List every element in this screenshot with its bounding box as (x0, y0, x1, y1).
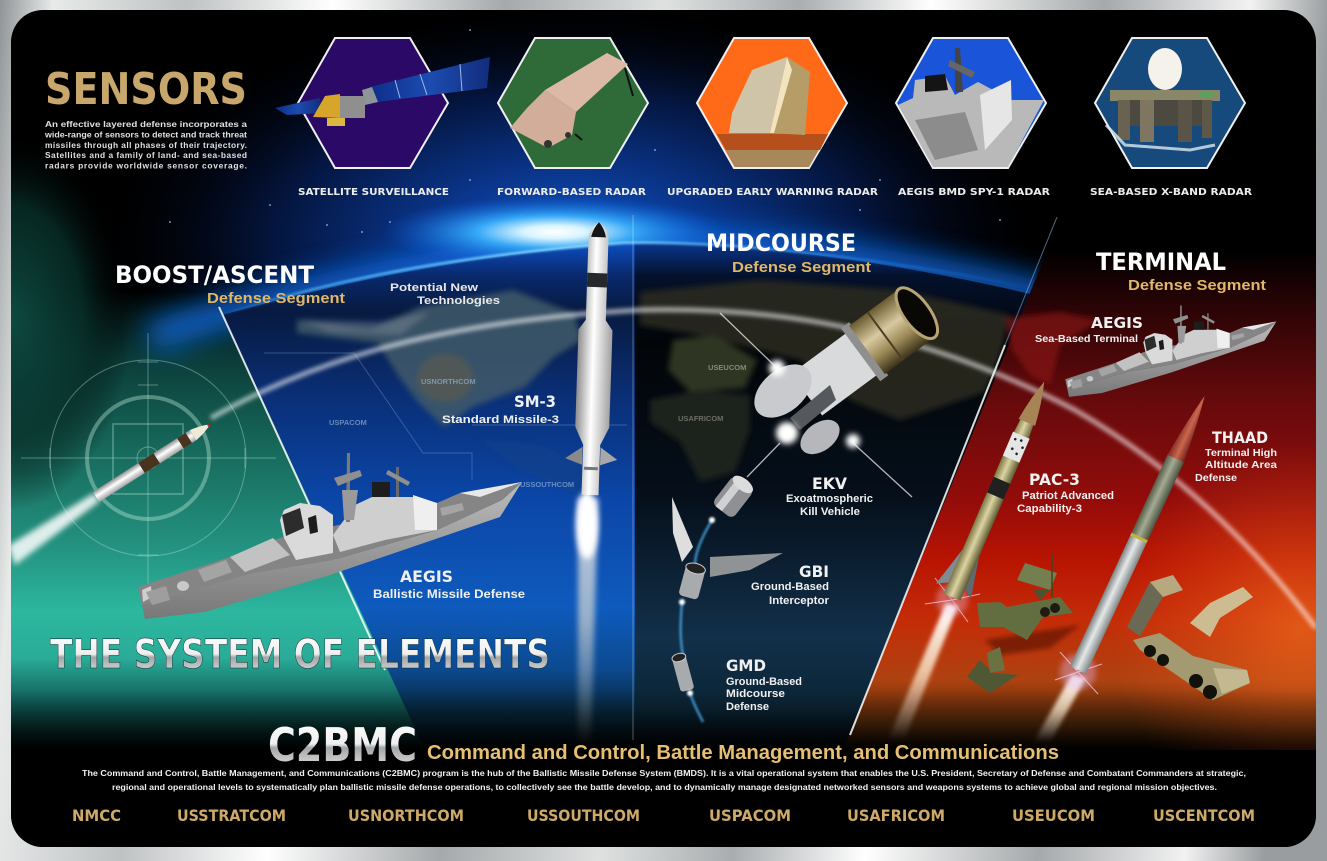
map command labels: USSOUTHCOM (520, 480, 574, 489)
heading: sensors: SENSORS (45, 64, 247, 115)
SM-3 plume (576, 491, 598, 745)
label: AEGIS ballistic missile defense: AEGIS (400, 567, 453, 586)
C2BMC description (82, 768, 1246, 792)
sensors description (44, 119, 247, 170)
icon: satellite (275, 57, 490, 126)
missile exhaust trail (8, 493, 100, 565)
label: GBI (751, 562, 830, 607)
combatant commands list: USNORTHCOM (348, 806, 464, 825)
sensors description: An effective layered defense incorporates a (45, 119, 247, 129)
label: THAAD: Defense (1195, 472, 1237, 484)
THAAD launcher truck (1127, 575, 1250, 700)
PAC-3 plume (888, 578, 980, 740)
PAC-3 radar (967, 647, 1018, 693)
heading: terminal (1096, 248, 1266, 294)
icon: sea-based radar platform (1106, 48, 1220, 150)
map command labels: USEUCOM (708, 363, 746, 372)
sensor labels: FORWARD-BASED RADAR (497, 187, 646, 198)
heading: C2BMC (268, 718, 1059, 772)
EKV rays (720, 313, 912, 497)
earth disc panels (224, 242, 1030, 740)
label: EKV: Kill Vehicle (800, 506, 860, 518)
heading: terminal: Defense Segment (1128, 277, 1266, 294)
hexagon: upgraded early warning radar (697, 38, 847, 168)
label: AEGIS sea-based terminal: AEGIS (1091, 314, 1143, 332)
C2BMC description: The Command and Control, Battle Management, and Communications (C2BMC) program is the hub of the Ballistic Missile Defense System (BMDS). It is a vital operational system that enables the U.S. President, Secretary of Defense and Combatant Commanders at strategic, (82, 768, 1246, 778)
SM-3 missile (565, 222, 617, 496)
sensor labels: AEGIS BMD SPY-1 RADAR (898, 187, 1050, 198)
heading: boost ascent: BOOST/ASCENT (115, 261, 315, 289)
terminal orange glow (1148, 463, 1316, 750)
label: GMD: Ground-Based (726, 676, 802, 688)
map command labels: USPACOM (329, 418, 367, 427)
heading: midcourse: Defense Segment (732, 259, 871, 276)
label: potential new technologies (390, 282, 500, 307)
icon: ship superstructure (898, 48, 1044, 167)
label: AEGIS sea-based terminal (1035, 314, 1143, 345)
boost phase missile (93, 419, 214, 502)
PAC-3 launcher (977, 553, 1080, 655)
label: GBI: GBI (799, 562, 829, 581)
panel: terminal segment (843, 222, 1316, 750)
title: the system of elements: THE SYSTEM OF ELEMENTS (50, 632, 550, 678)
sky band above earth limb (150, 243, 1090, 338)
THAAD missile (1070, 392, 1213, 674)
label: GBI: Interceptor (769, 595, 830, 607)
north america landmass (297, 290, 600, 495)
sensor labels: SATELLITE SURVEILLANCE (298, 187, 449, 198)
teal glow at left edge (11, 165, 118, 504)
sensors description: Satellites and a family of land- and sea-based (45, 150, 247, 160)
map command labels: USAFRICOM (678, 414, 723, 423)
label: GBI: Ground-Based (751, 581, 829, 593)
heading: boost ascent (115, 261, 345, 307)
label: potential new technologies: Technologies (417, 295, 500, 307)
label: EKV: Exoatmospheric (786, 493, 873, 505)
C2BMC description: regional and operational levels to systematically plan ballistic missile defense operations, to collectively see the battle develop, and to dynamically manage designated networked sensors and weapons systems to achieve global and regional mission objectives. (112, 782, 1217, 792)
label: AEGIS sea-based terminal: Sea-Based Terminal (1035, 333, 1138, 345)
heading: midcourse: MIDCOURSE (706, 229, 856, 257)
asia europe africa landmass (640, 280, 1010, 482)
label: THAAD: THAAD (1212, 428, 1268, 447)
AEGIS ship large (138, 453, 522, 619)
label: THAAD (1195, 428, 1277, 484)
heading: boost ascent: Defense Segment (207, 290, 345, 307)
hexagon: sea-based x-band radar (1095, 38, 1245, 168)
combatant commands list: NMCC (72, 806, 121, 825)
icon: radar trailer (510, 53, 633, 148)
regional map lines (264, 353, 627, 480)
label: GMD: Midcourse (726, 688, 785, 700)
bottom fade (11, 690, 1316, 750)
sensor labels: UPGRADED EARLY WARNING RADAR (667, 187, 878, 198)
label: THAAD: Terminal High (1205, 447, 1277, 459)
sun glow on horizon (388, 199, 713, 256)
bottom black band (11, 750, 1316, 850)
panel: boost ascent blue segment (224, 243, 635, 740)
GBI stage fragments (671, 472, 783, 696)
combatant commands list: USPACOM (709, 806, 791, 825)
heading: midcourse (706, 229, 871, 276)
label: GMD: GMD (726, 656, 766, 675)
crosshair target (21, 333, 276, 590)
starfield (169, 29, 1001, 233)
hexagon: aegis spy-1 radar (896, 38, 1046, 168)
label: AEGIS ballistic missile defense: Ballistic Missile Defense (373, 589, 525, 601)
map command labels (329, 363, 746, 489)
icon: radar building (717, 57, 828, 167)
combatant commands list: USSTRATCOM (177, 806, 286, 825)
EKV kill vehicle (754, 286, 940, 454)
label: EKV (786, 474, 873, 518)
label: PAC-3: Capability-3 (1017, 503, 1082, 515)
earth limb (215, 243, 1040, 317)
heading: C2BMC: Command and Control, Battle Management, and Communications (427, 742, 1059, 764)
hexagon: satellite surveillance (275, 38, 490, 168)
label: GMD (726, 656, 802, 713)
sensor labels: SEA-BASED X-BAND RADAR (1090, 187, 1252, 198)
THAAD radar (1190, 587, 1253, 637)
sensors description: missiles through all phases of their trajectory. (45, 140, 247, 150)
label: PAC-3: Patriot Advanced (1022, 490, 1114, 502)
combatant commands list: USCENTCOM (1153, 806, 1255, 825)
combatant commands list (72, 806, 1255, 825)
label: GMD: Defense (726, 701, 769, 713)
label: SM-3: SM-3 (514, 392, 556, 411)
label: SM-3: Standard Missile-3 (442, 414, 559, 426)
trajectory arc (211, 310, 1316, 628)
label: AEGIS ballistic missile defense (373, 567, 525, 601)
combatant commands list: USEUCOM (1012, 806, 1095, 825)
divider lines between segments (219, 215, 1057, 740)
label: EKV: EKV (812, 474, 848, 493)
label: SM-3 (442, 392, 559, 426)
label: THAAD: Altitude Area (1205, 459, 1277, 471)
map command labels: USNORTHCOM (421, 377, 476, 386)
combatant commands list: USAFRICOM (847, 806, 945, 825)
heading: terminal: TERMINAL (1096, 248, 1226, 276)
label: PAC-3 (1017, 470, 1114, 515)
terminal map landmass (1005, 312, 1100, 385)
sensor labels (298, 187, 1252, 198)
panel: boost ascent teal segment (11, 290, 427, 750)
THAAD plume (1034, 652, 1102, 742)
hexagon: forward-based radar (498, 38, 648, 168)
label: potential new technologies: Potential New (390, 282, 479, 294)
PAC-3 missile (936, 382, 1044, 600)
panel: midcourse segment (635, 242, 1030, 738)
GBI blue trails (681, 520, 712, 722)
sensors description: wide-range of sensors to detect and track threat (44, 130, 247, 140)
heading: C2BMC: C2BMC (268, 718, 417, 772)
sensors description: radars provide worldwide sensor coverage. (45, 160, 247, 170)
label: PAC-3: PAC-3 (1029, 470, 1080, 489)
AEGIS ship small (1065, 306, 1276, 397)
combatant commands list: USSOUTHCOM (527, 806, 640, 825)
